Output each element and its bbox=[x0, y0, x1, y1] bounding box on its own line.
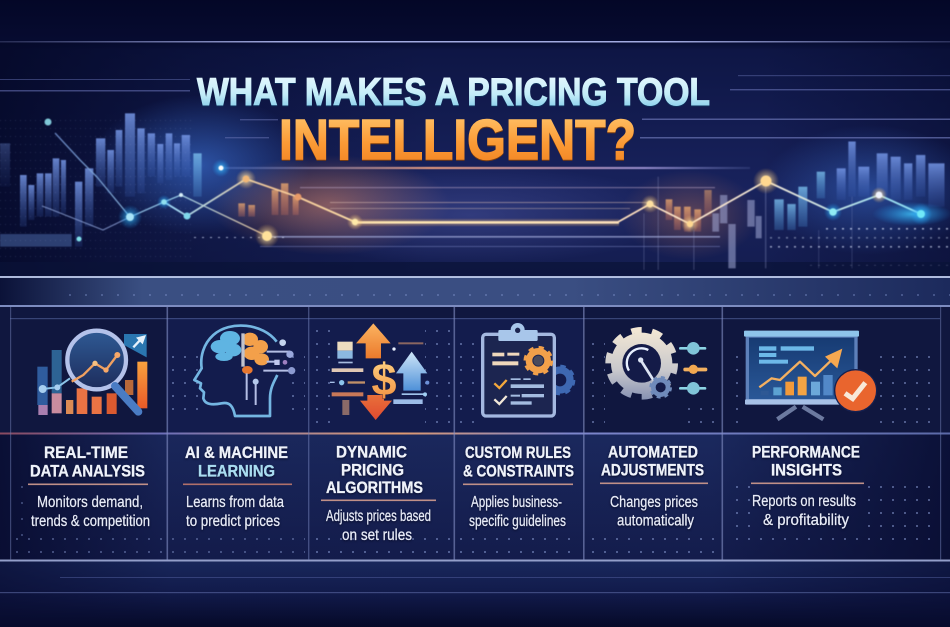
panel: ai and machine learning bbox=[183, 326, 295, 530]
heading: CUSTOM RULES bbox=[465, 444, 571, 462]
divider bbox=[751, 482, 864, 484]
panel: performance insights bbox=[744, 331, 877, 529]
title line two: INTELLIGENT? bbox=[279, 108, 636, 172]
heading bbox=[185, 444, 288, 480]
description bbox=[610, 494, 698, 530]
description: to predict prices bbox=[186, 513, 280, 530]
divider bbox=[183, 484, 292, 485]
trend lines with nodes bbox=[42, 118, 932, 248]
icon: gear with dial and sliders bbox=[608, 330, 707, 397]
dotted data rows bbox=[0, 114, 950, 268]
description bbox=[186, 494, 284, 530]
description: & profitability bbox=[763, 512, 849, 529]
icon: price arrows and dollar sign: $ bbox=[371, 354, 397, 405]
heading: PERFORMANCE bbox=[752, 444, 860, 462]
description: Changes prices bbox=[610, 494, 698, 511]
dotted strip divider bbox=[0, 276, 950, 307]
heading bbox=[463, 444, 574, 480]
heading: DYNAMIC bbox=[336, 444, 407, 462]
heading: ALGORITHMS bbox=[326, 479, 423, 497]
heading: ADJUSTMENTS bbox=[601, 462, 704, 480]
heading bbox=[752, 444, 860, 480]
description bbox=[469, 494, 566, 530]
description bbox=[31, 494, 150, 530]
heading: AUTOMATED bbox=[608, 444, 698, 462]
title bbox=[197, 71, 710, 172]
panel: real-time data analysis bbox=[28, 331, 150, 530]
orange and blue horizontal trails bbox=[220, 167, 950, 247]
heading: LEARNING bbox=[198, 462, 275, 480]
heading: REAL-TIME bbox=[44, 444, 128, 462]
bar chart: orange candles bbox=[238, 183, 299, 217]
heading: AI & MACHINE bbox=[185, 444, 288, 462]
description: specific guidelines bbox=[469, 513, 566, 530]
heading: INSIGHTS bbox=[771, 462, 842, 480]
divider bbox=[28, 484, 148, 485]
heading bbox=[326, 444, 423, 497]
description: on set rules bbox=[342, 527, 412, 544]
heading bbox=[30, 444, 145, 480]
bar chart: left blue bars bbox=[0, 113, 202, 247]
icon: clipboard with gear and checks bbox=[483, 323, 573, 416]
panel: dynamic pricing algorithms bbox=[321, 323, 436, 544]
heading bbox=[601, 444, 704, 480]
icon: head with brain circuit bbox=[194, 326, 295, 416]
heading: PRICING bbox=[341, 462, 404, 480]
price chart band bbox=[0, 113, 950, 270]
panel: automated adjustments bbox=[600, 330, 708, 530]
description bbox=[752, 493, 856, 529]
description: Learns from data bbox=[186, 494, 284, 511]
divider bbox=[600, 482, 708, 484]
title line one: WHAT MAKES A PRICING TOOL bbox=[197, 71, 710, 114]
description: Applies business- bbox=[471, 494, 562, 511]
heading: & CONSTRAINTS bbox=[463, 462, 574, 480]
bar chart: right candles and bars bbox=[643, 142, 944, 270]
panel: custom rules and constraints bbox=[463, 323, 574, 530]
heading: DATA ANALYSIS bbox=[30, 462, 145, 480]
description: trends & competition bbox=[31, 513, 150, 530]
icon: presentation board with chart and check badge bbox=[744, 331, 877, 419]
footer band bbox=[0, 562, 950, 627]
description bbox=[326, 508, 431, 544]
description: Reports on results bbox=[752, 493, 856, 510]
divider bbox=[321, 500, 436, 501]
feature panel grid bbox=[0, 307, 950, 562]
divider bbox=[463, 484, 573, 485]
icon: bar chart with magnifying glass bbox=[37, 331, 147, 415]
description: Monitors demand, bbox=[37, 494, 143, 511]
description: automatically bbox=[617, 512, 694, 530]
icon: price arrows and dollar sign bbox=[330, 323, 429, 420]
description: Adjusts prices based bbox=[326, 508, 431, 525]
